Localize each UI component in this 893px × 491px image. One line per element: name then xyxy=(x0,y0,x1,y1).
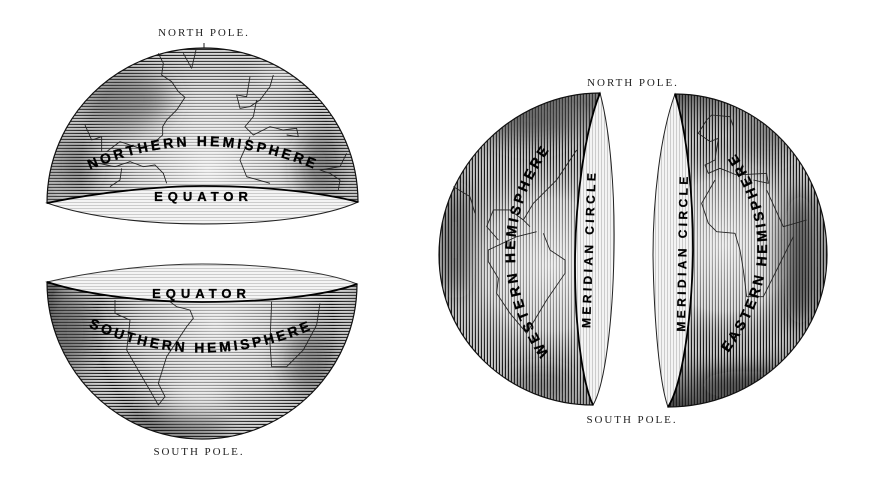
heading: eastern hemisphere: EASTERN HEMISPHERE xyxy=(720,154,768,352)
label: equator northern: EQUATOR xyxy=(154,189,253,204)
northern dome xyxy=(47,43,358,203)
heading: western hemisphere: WESTERN HEMISPHERE xyxy=(505,146,549,359)
label: north pole: NORTH POLE. xyxy=(158,27,250,39)
continents: southern xyxy=(115,300,320,405)
panel: southern hemisphere xyxy=(45,264,358,458)
panel: western hemisphere xyxy=(438,77,679,426)
continents: western xyxy=(453,150,577,333)
heading: southern hemisphere: SOUTHERN HEMISPHERE xyxy=(90,319,310,353)
label: south pole: SOUTH POLE. xyxy=(153,446,245,458)
southern bowl xyxy=(47,282,357,439)
label: north pole right: NORTH POLE. xyxy=(587,77,679,89)
meridian disc: eastern xyxy=(653,94,693,407)
panel: northern hemisphere xyxy=(45,27,360,224)
label: meridian circle western: MERIDIAN CIRCLE xyxy=(582,174,596,328)
panel: eastern hemisphere xyxy=(652,92,828,408)
label: south pole right: SOUTH POLE. xyxy=(586,414,678,426)
meridian disc: western xyxy=(575,93,614,405)
western half sphere xyxy=(439,93,600,405)
continents: eastern xyxy=(698,115,807,297)
label: meridian circle eastern: MERIDIAN CIRCLE xyxy=(676,177,688,332)
illustration: globe divided into hemispheres xyxy=(45,29,828,455)
label: equator southern: EQUATOR xyxy=(152,286,251,301)
equator disc: northern xyxy=(47,186,358,224)
heading: northern hemisphere: NORTHERN HEMISPHERE xyxy=(87,136,316,170)
eastern half sphere xyxy=(668,94,827,407)
equator disc: southern xyxy=(47,264,357,302)
continents: northern xyxy=(85,50,347,190)
